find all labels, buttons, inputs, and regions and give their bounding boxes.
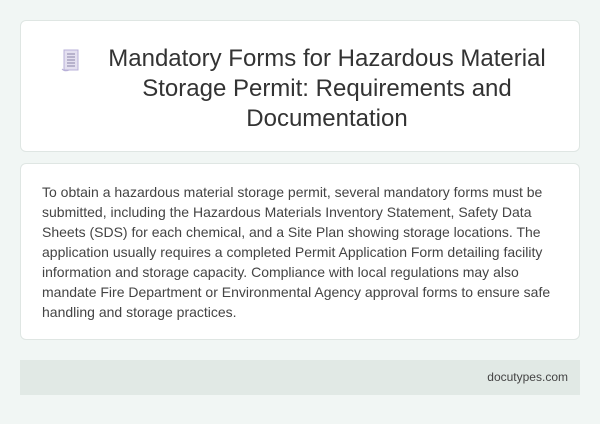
icon: document — [62, 50, 78, 72]
footer text: docutypes.com — [487, 370, 568, 384]
footer — [20, 360, 580, 395]
title: Mandatory Forms for Hazardous Material Storage Permit: Requirements and Documentation — [108, 45, 546, 132]
panel: description — [20, 163, 580, 340]
panel: header — [20, 20, 580, 152]
text block: To obtain a hazardous material storage permit, several mandatory forms must be submitted, including the Hazardous Materials Inventory Statement, Safety Data Sheets (SDS) for each chemical, and a Site Plan showing storage locations. The application usually requires a completed Permit Application Form detailing facility information and storage capacity. Compliance with local regulations may also mandate Fire Department or Environmental Agency approval forms to ensure safe handling and storage practices. — [42, 184, 550, 320]
